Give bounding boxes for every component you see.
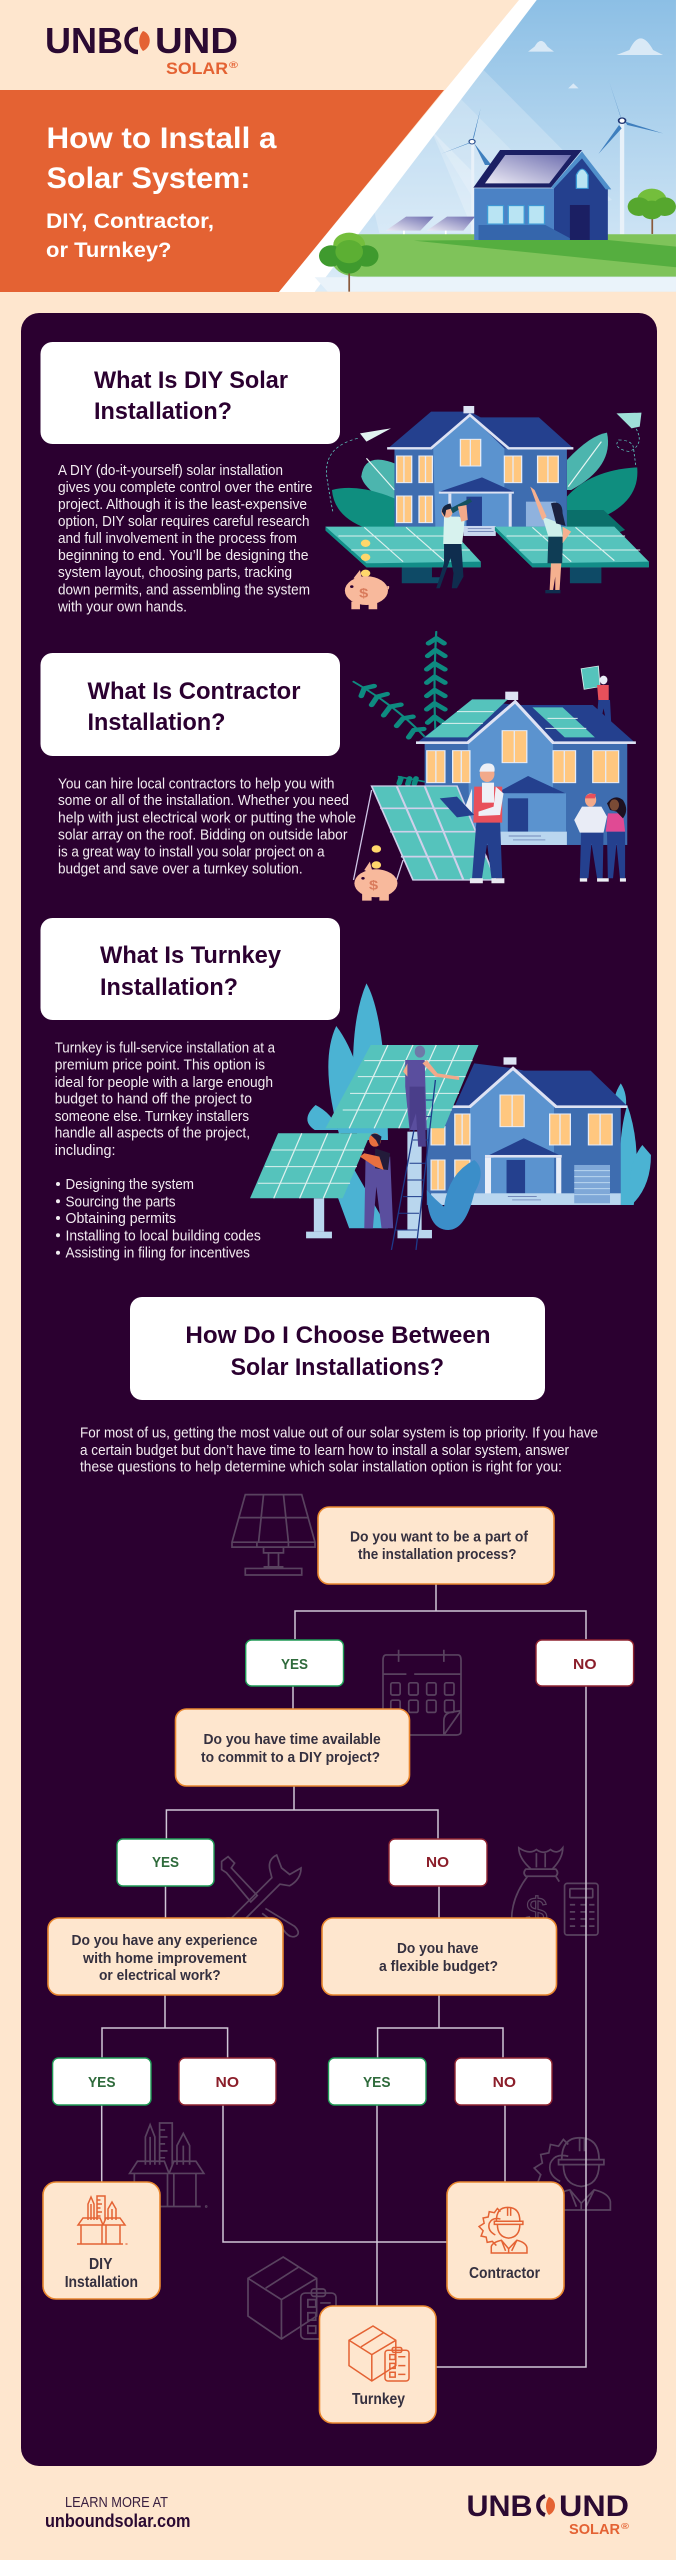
answer: no: NO: [216, 2074, 239, 2091]
question: time available: [176, 1709, 410, 1786]
text block: contractor description: You can hire local contractors to help you with: [58, 776, 334, 792]
answer: no: [536, 1640, 634, 1686]
text block: contractor description: help with just electrical work or putting the whole: [58, 810, 356, 826]
text block: turnkey description: someone else. Turnkey installers: [55, 1109, 249, 1125]
porch: [440, 477, 514, 492]
clouds: [528, 38, 663, 88]
result: turnkey: Turnkey: [352, 2391, 405, 2408]
house: [388, 412, 573, 448]
heading box: how to choose: Solar Installations?: [231, 1354, 444, 1381]
logo: Unbound Solar footer: UNB: [466, 2490, 532, 2523]
footer call to action: unboundsolar.com: [45, 2511, 190, 2531]
text block: contractor description: is a great way to install you solar project on a: [58, 845, 325, 861]
bullet list: turnkey services: Assisting in filing for incentives: [66, 1246, 250, 1262]
logo: Unbound Solar top: [45, 20, 238, 78]
text block: turnkey description: [55, 1040, 276, 1159]
text block: flowchart intro: these questions to help determine which solar installation option is right for you:: [80, 1460, 562, 1476]
trees: [628, 189, 676, 234]
text block: turnkey description: handle all aspects of the project,: [55, 1126, 250, 1142]
question: experience: [48, 1918, 283, 1995]
icon: ghost toolbox: [128, 2123, 207, 2207]
text block: contractor description: some or all of the installation. Whether you need: [58, 793, 349, 809]
contractor: [440, 763, 504, 883]
windows: [397, 439, 558, 523]
house: [455, 1063, 627, 1106]
answer: no: [179, 2058, 276, 2105]
answer: yes: YES: [152, 1854, 179, 1871]
logo: Unbound Solar footer: [466, 2490, 629, 2538]
turbines: [441, 82, 663, 234]
porch: [496, 776, 566, 793]
logo: Unbound Solar footer: ®: [621, 2522, 629, 2531]
foreground plant: [427, 1160, 481, 1230]
piggy bank and coins: [345, 540, 389, 609]
illustration: DIY house with panels, people and piggy bank: [325, 406, 649, 609]
logo: Unbound Solar top: UNB: [45, 20, 123, 61]
house: [474, 188, 554, 240]
heading box: DIY: What Is DIY Solar: [94, 367, 288, 394]
footer call to action: LEARN MORE AT: [65, 2495, 168, 2511]
ferns: [354, 632, 445, 784]
answer: yes: [53, 2058, 151, 2105]
result: DIY installation: Installation: [65, 2274, 138, 2291]
question: be part of install: the installation process?: [358, 1546, 516, 1563]
ground: [331, 234, 676, 277]
result: DIY installation: [43, 2182, 160, 2299]
heading box: turnkey: [40, 918, 340, 1020]
text block: turnkey description: premium price point. This option is: [55, 1058, 265, 1074]
heading box: contractor: [40, 653, 340, 756]
text block: turnkey description: including:: [55, 1143, 116, 1159]
piggy bank and coins: [354, 845, 397, 901]
ladder and post: [391, 1080, 435, 1250]
big panel: [354, 786, 496, 880]
icon: contractor: [479, 2207, 527, 2253]
text block: flowchart intro: [80, 1426, 598, 1476]
heading box: DIY: [40, 342, 340, 444]
man with telescope: [436, 498, 472, 588]
bullet list: turnkey services: Installing to local building codes: [66, 1228, 261, 1244]
question: experience: Do you have any experience: [72, 1932, 258, 1949]
windows: [431, 1095, 612, 1190]
heading box: how to choose: [130, 1297, 545, 1400]
logo: Unbound Solar top: SOLAR: [166, 60, 228, 78]
question: be part of install: Do you want to be a part of: [350, 1529, 529, 1546]
text block: DIY description: and full involvement in the process from: [58, 531, 297, 547]
heading box: contractor: What Is Contractor: [88, 678, 301, 705]
solar panels: [325, 527, 649, 583]
text block: turnkey description: Turnkey is full-service installation at a: [55, 1040, 276, 1056]
answer: no: NO: [426, 1854, 449, 1871]
answer: yes: YES: [88, 2074, 116, 2091]
question: experience: with home improvement: [82, 1950, 247, 1967]
result: turnkey: [320, 2306, 436, 2423]
logo: Unbound Solar top: UND: [155, 20, 238, 61]
title: or Turnkey?: [46, 239, 172, 262]
text block: DIY description: down permits, and assembling the system: [58, 582, 310, 598]
flight trails and paper planes: [326, 425, 639, 512]
main dark panel: [21, 313, 657, 2466]
logo: Unbound Solar footer: SOLAR: [569, 2521, 620, 2538]
question: time available: to commit to a DIY project?: [201, 1749, 380, 1766]
question: flexible budget: a flexible budget?: [379, 1958, 498, 1975]
piggy bank and coins: $: [359, 587, 368, 601]
text block: DIY description: option, DIY solar requires careful research: [58, 514, 310, 530]
illustration: solar home with wind turbines: [279, 0, 676, 292]
couple: [574, 793, 626, 882]
question: flexible budget: [322, 1918, 556, 1995]
result: DIY installation: DIY: [89, 2256, 113, 2273]
text block: flowchart intro: For most of us, getting the most value out of our solar system is top priority. If you have: [80, 1426, 598, 1442]
heading box: contractor: Installation?: [88, 709, 226, 736]
answer: no: NO: [573, 1656, 597, 1673]
illustration: turnkey house with installers: [250, 983, 651, 1250]
logo: Unbound Solar top: ®: [229, 60, 238, 70]
illustration: contractor house with big panel and people: [354, 632, 636, 901]
answer: yes: [328, 2058, 426, 2105]
text block: flowchart intro: a certain budget but don’t have time to learn how to install a solar system, answer: [80, 1443, 569, 1459]
text block: contractor description: budget and save over a turnkey solution.: [58, 862, 303, 878]
text block: DIY description: A DIY (do-it-yourself) solar installation: [58, 463, 283, 479]
text block: DIY description: beginning to end. You’ll be designing the: [58, 548, 309, 564]
icon: ghost contractor: [534, 2138, 610, 2210]
windows: [427, 731, 619, 783]
text block: DIY description: system layout, choosing parts, tracking: [58, 565, 292, 581]
icon: ghost solar panel: [232, 1495, 315, 1575]
icon: package and clipboard: [349, 2326, 409, 2381]
icon: toolbox: [77, 2196, 127, 2244]
icon: ghost calendar: [383, 1650, 461, 1735]
heading box: how to choose: How Do I Choose Between: [185, 1322, 491, 1349]
woman pointing: [530, 487, 571, 593]
answer: no: NO: [493, 2074, 516, 2091]
rooftop worker with panel: [581, 666, 611, 725]
big panel: [325, 1045, 479, 1128]
porch: [489, 1138, 559, 1155]
small panel on stand: [250, 1133, 371, 1238]
installer on ladder: [403, 1046, 459, 1147]
icon: ghost tools: [220, 1855, 301, 1937]
plants: [307, 983, 651, 1228]
logo: Unbound Solar footer: UND: [559, 2490, 629, 2523]
title banner: [0, 90, 444, 292]
result: contractor: Contractor: [469, 2265, 540, 2282]
title: DIY, Contractor,: [46, 210, 214, 233]
flowchart connectors: [102, 1584, 586, 2367]
title: How to Install a: [46, 122, 277, 155]
ground panels: [386, 217, 475, 240]
heading box: turnkey: Installation?: [100, 974, 238, 1001]
text block: contractor description: [58, 776, 356, 878]
question: experience: or electrical work?: [99, 1967, 221, 1984]
installer with panel: [360, 1133, 393, 1228]
question: be part of install: [318, 1507, 554, 1584]
result: contractor: [447, 2182, 564, 2299]
footer call to action: [45, 2495, 190, 2531]
answer: yes: YES: [281, 1656, 308, 1673]
text block: DIY description: project. Although it is the least-expensive: [58, 497, 307, 513]
text block: turnkey description: ideal for people with a large enough: [55, 1075, 273, 1091]
question: flexible budget: Do you have: [397, 1940, 478, 1957]
bullet list: turnkey services: Obtaining permits: [66, 1211, 176, 1227]
title: Solar System:: [46, 162, 250, 195]
heading box: DIY: Installation?: [94, 398, 232, 425]
answer: yes: [117, 1839, 214, 1886]
icon: ghost money bag and calculator: [512, 1848, 598, 1935]
answer: yes: [246, 1640, 344, 1686]
bullet list: turnkey services: Designing the system: [66, 1177, 194, 1193]
text block: DIY description: [57, 463, 312, 616]
house: [416, 700, 636, 743]
question: time available: Do you have time available: [204, 1731, 381, 1748]
answer: no: [455, 2058, 552, 2105]
text block: turnkey description: budget to hand off the project to: [55, 1092, 252, 1108]
bullet list: turnkey services: Sourcing the parts: [66, 1194, 176, 1210]
text block: DIY description: gives you complete control over the entire: [58, 480, 312, 496]
piggy bank and coins: $: [369, 879, 378, 893]
title: [46, 122, 277, 262]
leaves: [332, 433, 637, 535]
answer: yes: YES: [363, 2074, 390, 2091]
text block: contractor description: solar array on the roof. Bidding on outside labor: [58, 828, 348, 844]
text block: DIY description: with your own hands.: [57, 600, 187, 616]
bullet list: turnkey services: [56, 1177, 261, 1262]
answer: no: [389, 1839, 487, 1886]
heading box: turnkey: What Is Turnkey: [100, 942, 281, 969]
icon: ghost package and clipboard: [248, 2257, 336, 2339]
